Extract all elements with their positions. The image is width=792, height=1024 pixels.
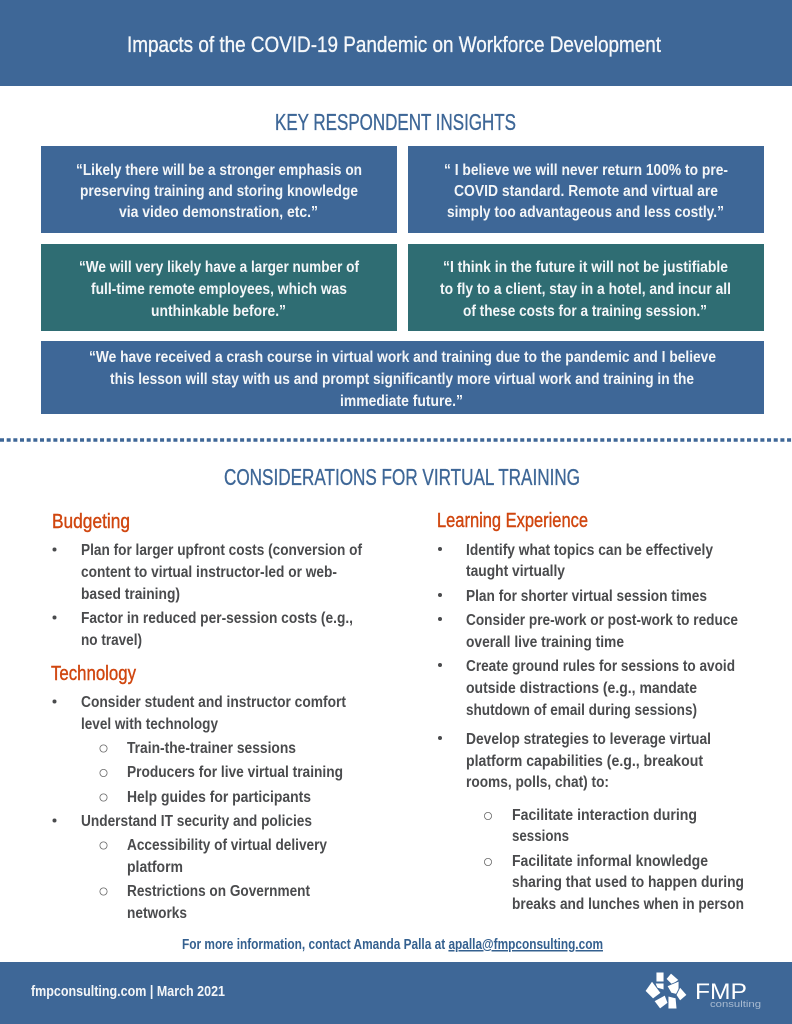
section: budgeting: based training) [81, 586, 180, 603]
section: technology: Accessibility of virtual delivery [127, 837, 327, 854]
section: technology: networks [127, 905, 187, 922]
section: learning experience: sessions [512, 828, 569, 845]
section: technology: Understand IT security and policies [81, 813, 312, 830]
section: learning experience: platform capabilities (e.g., breakout [466, 753, 704, 770]
footer banner [0, 962, 792, 1024]
section: technology: Producers for live virtual training [127, 764, 343, 781]
subheading: learning experience: Learning Experience [437, 509, 588, 532]
logo wordmark: FMP [695, 979, 747, 1004]
panel: quote on travel costs: of these costs for a training session.” [463, 303, 707, 320]
section: technology: Help guides for participants [127, 789, 311, 806]
panel: quote on remote employees: “We will very likely have a larger number of [79, 259, 360, 276]
header banner [0, 0, 792, 86]
heading: considerations for virtual training: CONSIDERATIONS FOR VIRTUAL TRAINING [224, 464, 580, 490]
section: learning experience: Create ground rules for sessions to avoid [466, 658, 735, 675]
section: technology: level with technology [81, 716, 218, 733]
logo wordmark: consulting [710, 999, 761, 1009]
section: learning experience: Facilitate informal knowledge [512, 853, 708, 870]
section: technology: Train-the-trainer sessions [127, 740, 296, 757]
section: learning experience: outside distractions (e.g., mandate [466, 680, 697, 697]
section: budgeting: Plan for larger upfront costs (conversion of [81, 542, 363, 559]
section: learning experience: shutdown of email during sessions) [466, 702, 697, 719]
panel: quote on preserving training: preserving training and storing knowledge [80, 183, 358, 200]
panel: quote on preserving training: via video demonstration, etc.” [119, 204, 318, 221]
section: technology [51, 662, 347, 922]
footer text: fmpconsulting.com | March 2021 [31, 983, 225, 1000]
panel: quote on crash course in virtual work: immediate future.” [340, 393, 463, 410]
logo wordmark [695, 979, 761, 1009]
panel: quote on preserving training [41, 146, 397, 233]
section: learning experience: overall live training time [466, 634, 624, 651]
section: budgeting: content to virtual instructor-led or web- [81, 564, 337, 581]
section: learning experience: taught virtually [466, 563, 565, 580]
panel: quote on remote employees: full-time remote employees, which was [91, 281, 347, 298]
panel: quote on remote employees: unthinkable before.” [151, 303, 286, 320]
panel: quote on travel costs [408, 244, 764, 331]
section: budgeting: Factor in reduced per-session costs (e.g., [81, 610, 353, 627]
section: learning experience: breaks and lunches when in person [512, 896, 744, 913]
section: budgeting: no travel) [81, 632, 142, 649]
section: learning experience: sharing that used to happen during [512, 874, 744, 891]
title: Impacts of the COVID-19 Pandemic on Workforce Development [127, 32, 662, 57]
section: technology: Restrictions on Government [127, 883, 311, 900]
section: learning experience: Consider pre-work or post-work to reduce [466, 612, 738, 629]
section: learning experience: Develop strategies to leverage virtual [466, 731, 711, 748]
icon: FMP logo mark [645, 972, 687, 1009]
panel: quote on remote and virtual advantage: simply too advantageous and less costly.” [447, 204, 724, 221]
panel: quote on remote and virtual advantage: COVID standard. Remote and virtual are [454, 183, 718, 200]
section: learning experience: Plan for shorter virtual session times [466, 588, 707, 605]
section: technology: platform [127, 859, 183, 876]
subheading: budgeting: Budgeting [52, 510, 130, 533]
section: technology: Consider student and instructor comfort [81, 694, 347, 711]
panel: quote on travel costs: “I think in the future it will not be justifiable [443, 259, 728, 276]
panel: quote on preserving training: “Likely there will be a stronger emphasis on [76, 162, 362, 179]
section: learning experience [437, 509, 744, 913]
panel: quote on remote and virtual advantage: “ I believe we will never return 100% to pre- [444, 162, 728, 179]
subheading: technology: Technology [51, 662, 137, 685]
section: learning experience: Facilitate interaction during [512, 807, 697, 824]
panel: quote on crash course in virtual work: this lesson will stay with us and prompt significantly more virtual work and training in the [110, 371, 694, 388]
heading: key respondent insights: KEY RESPONDENT INSIGHTS [275, 109, 516, 135]
panel: quote on crash course in virtual work [41, 341, 764, 414]
section: learning experience: Identify what topics can be effectively [466, 542, 713, 559]
panel: quote on remote employees [41, 244, 397, 331]
panel: quote on remote and virtual advantage [408, 146, 764, 233]
panel: quote on travel costs: to fly to a client, stay in a hotel, and incur all [440, 281, 731, 298]
contact line: For more information, contact Amanda Palla at apalla@fmpconsulting.com [182, 936, 603, 953]
section: learning experience: rooms, polls, chat) to: [466, 774, 609, 791]
section: budgeting [52, 510, 363, 649]
